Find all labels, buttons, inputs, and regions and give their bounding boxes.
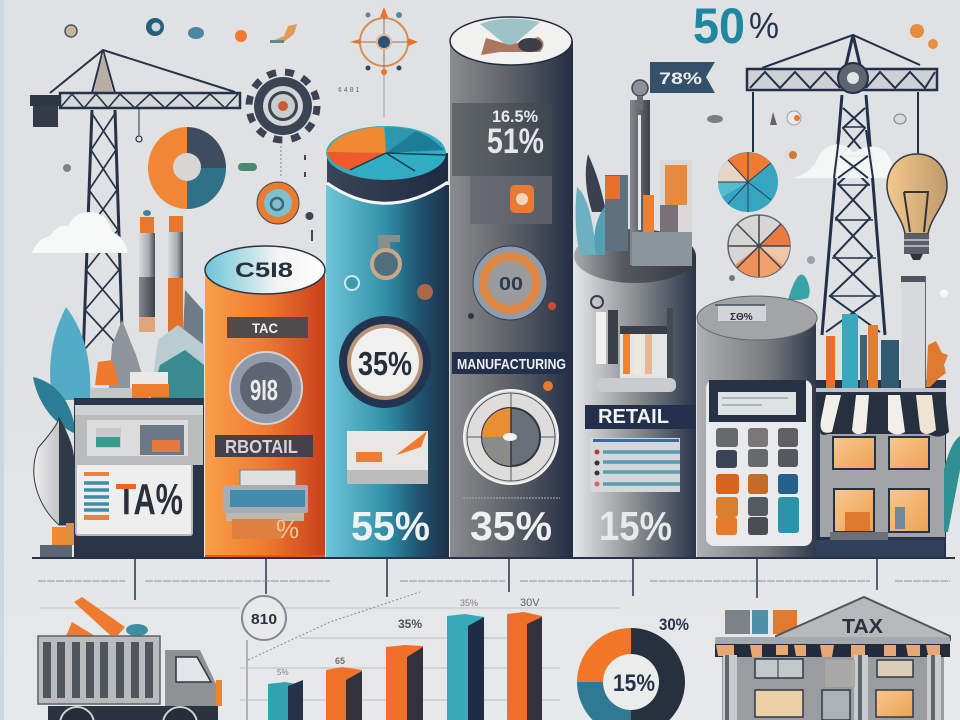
icon: orange tag [510,185,534,213]
shelf graphic [596,308,676,392]
storefront [816,276,949,558]
text: gauge value: 9I8 [250,375,278,407]
left building with TA% panel [34,398,204,558]
chimneys [139,210,183,332]
text: 35%: 35% [470,503,552,549]
pie on cap [326,126,446,180]
bar chart [240,592,560,720]
text: TAX: TAX [842,616,884,638]
right cloud [793,144,894,178]
text: 15%: 15% [613,670,655,697]
text: cap label: ΣΘ% [730,312,753,323]
left crane [30,50,240,360]
list card [590,438,680,492]
scatter icons right [707,24,948,300]
donut chart [577,615,689,720]
target chart [464,390,558,484]
text: 16.5%: 16.5% [492,107,538,126]
flag: 78% [650,62,715,93]
text: 50%: % [749,5,779,46]
pie chart: teal and orange [718,152,778,212]
bar: orange cylinder [205,246,325,558]
target icon [338,7,418,118]
right crane tower over cloud [834,130,873,178]
pie chart: light wheel [728,215,790,277]
text: percent sign: % [276,514,299,544]
gauge [473,246,547,320]
windows [833,437,875,469]
baseline and connectors [32,558,955,608]
right crane [747,35,937,335]
card [347,431,428,484]
text: gauge value: 00 [499,274,523,294]
bank building [715,597,950,720]
text: cylinder cap label: C5I8 [235,259,293,282]
text: RBOTAIL: RBOTAIL [225,437,298,457]
gray cylinder with calculator [697,296,817,558]
bar chart: 35% [460,598,478,608]
text: 810: 810 [251,611,277,628]
text: 51%: 51% [487,122,544,161]
right leaf [944,436,960,532]
round orange badge [238,146,314,241]
text: 50% [693,0,779,54]
text: 78%: 78% [659,69,702,88]
text: TAC: TAC [252,320,278,336]
text: bar labels: 65 [335,656,345,666]
text: small note: ¢ 4 8 1 [338,87,360,94]
left industrial plants [33,290,204,434]
bar: light gray cylinder [574,229,696,558]
bar: teal cylinder [326,126,449,558]
text: 35% gauge: 35% [358,345,412,382]
bar: gray cylinder [450,17,573,558]
shelf of products [816,276,948,392]
icon: tall digit [372,235,400,278]
light bulb [887,154,947,260]
factory on light cylinder [576,80,692,266]
text: 55%: 55% [351,503,430,549]
bar chart: 30V [520,597,540,609]
gauge [339,316,431,408]
awning [816,394,949,437]
truck [38,597,222,720]
bar chart: 35% [398,617,422,631]
text: 15%: 15% [599,503,672,549]
badge: 810 [242,596,286,720]
text: manufacturing: MANUFACTURING [457,356,566,373]
text: 30%: 30% [659,615,689,634]
gear icon [249,72,317,140]
icons: top scatter left [65,18,297,43]
text: TA%: TA% [117,475,183,524]
left pie chart [148,127,226,209]
text: RETAIL: RETAIL [598,406,669,428]
left cloud [32,212,128,253]
bar chart: 5% [277,668,289,677]
calculator [706,380,812,546]
